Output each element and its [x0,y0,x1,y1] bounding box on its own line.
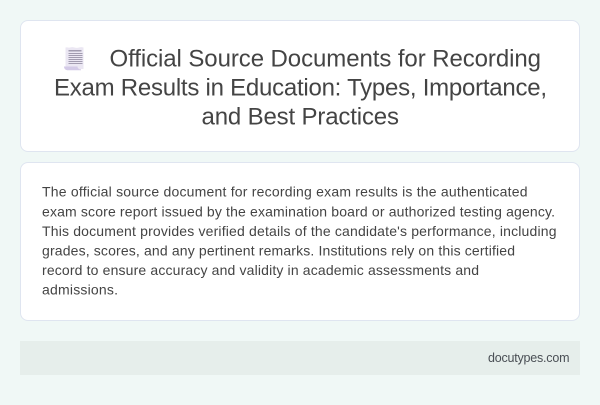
icon: document scroll [64,47,84,70]
title: Official Source Documents for Recording [110,46,541,73]
text block: description: admissions. [42,282,118,298]
text block: description: The official source document for recording exam results is the authenticated [42,184,528,200]
text block: description [42,184,556,298]
text block: description: record to ensure accuracy and validity in academic assessments and [42,262,479,278]
title [54,46,547,131]
text block: description: grades, scores, and any pertinent remarks. Institutions rely on this certified [42,242,515,258]
footer text: docutypes.com [488,351,570,365]
text block: description: exam score report issued by the examination board or authorized testing agency. [42,203,555,219]
panel: title card [20,20,580,152]
footer bar [20,341,580,375]
title: Exam Results in Education: Types, Importance, [54,75,547,102]
title: and Best Practices [202,104,399,131]
panel: description card [20,162,580,321]
text block: description: This document provides verified details of the candidate's performance, including [42,223,556,239]
